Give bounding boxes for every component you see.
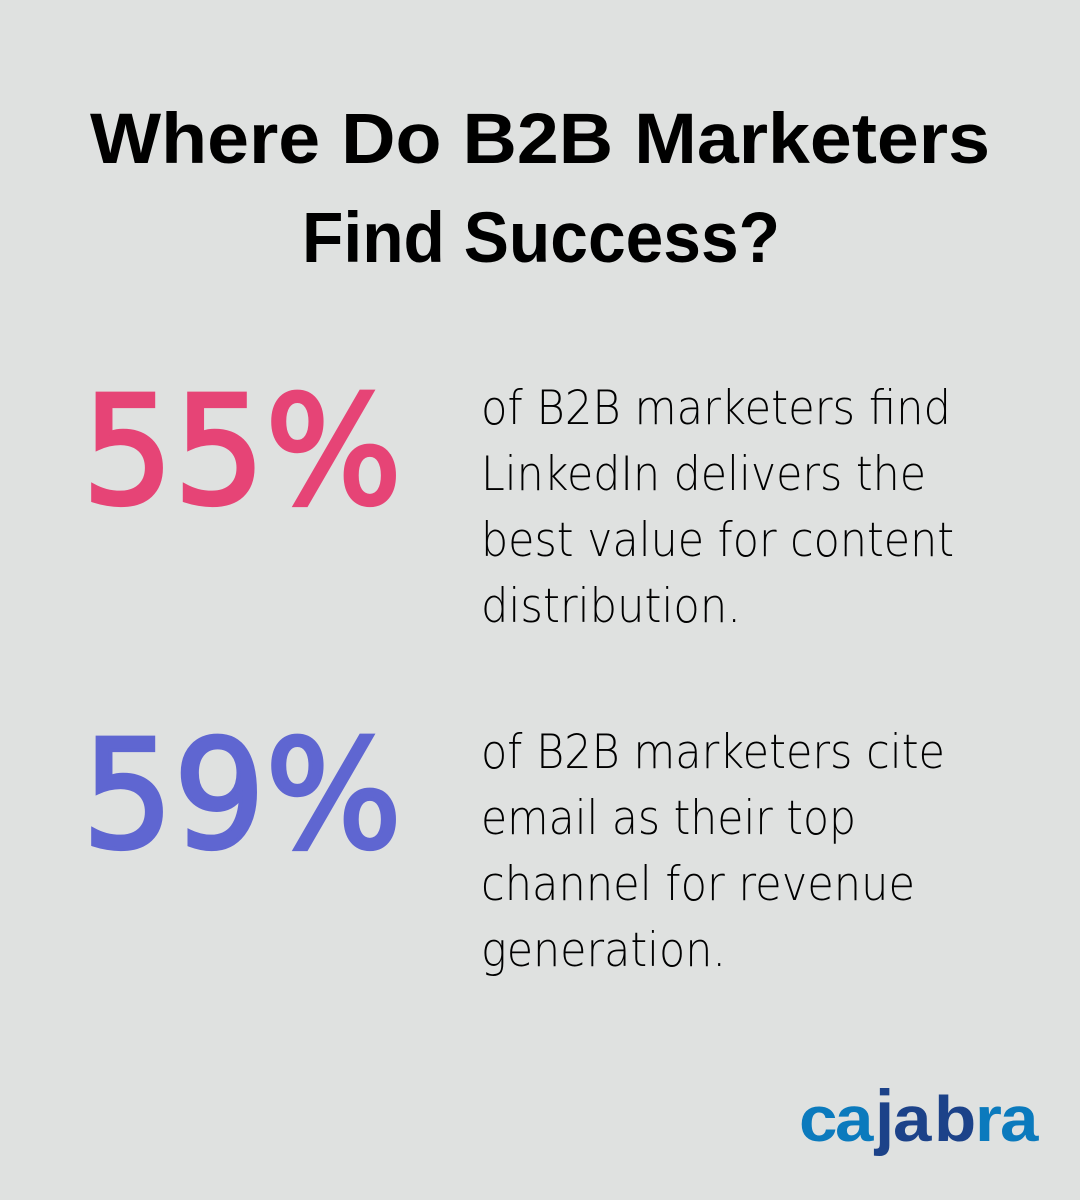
title: Where Do B2B Marketers	[90, 100, 990, 179]
logo: cajabra: a	[835, 1084, 874, 1155]
stat: 55%: 55%	[82, 365, 402, 539]
logo: cajabra: r	[975, 1084, 1002, 1155]
logo: cajabra: a	[893, 1084, 932, 1155]
text block: LinkedIn stat description	[481, 381, 954, 634]
logo: cajabra: a	[1000, 1084, 1039, 1155]
text block: email stat description: channel for revenue	[481, 857, 915, 912]
text block: email stat description: of B2B marketers cite	[481, 725, 945, 780]
text block: LinkedIn stat description: distribution.	[481, 579, 741, 634]
text block: LinkedIn stat description: LinkedIn delivers the	[481, 447, 926, 502]
text block: LinkedIn stat description: of B2B marketers find	[481, 381, 951, 436]
text block: LinkedIn stat description: best value for content	[481, 513, 954, 568]
title	[90, 100, 990, 278]
text block: email stat description	[481, 725, 945, 978]
logo: cajabra: b	[934, 1084, 976, 1155]
logo: cajabra: j	[873, 1075, 894, 1157]
text block: email stat description: email as their top	[481, 791, 856, 846]
logo: cajabra	[799, 1075, 1039, 1157]
stat: 59%: 59%	[82, 709, 402, 883]
title: Find Success?	[302, 199, 780, 278]
text block: email stat description: generation.	[481, 923, 726, 978]
logo: cajabra: c	[799, 1084, 837, 1155]
